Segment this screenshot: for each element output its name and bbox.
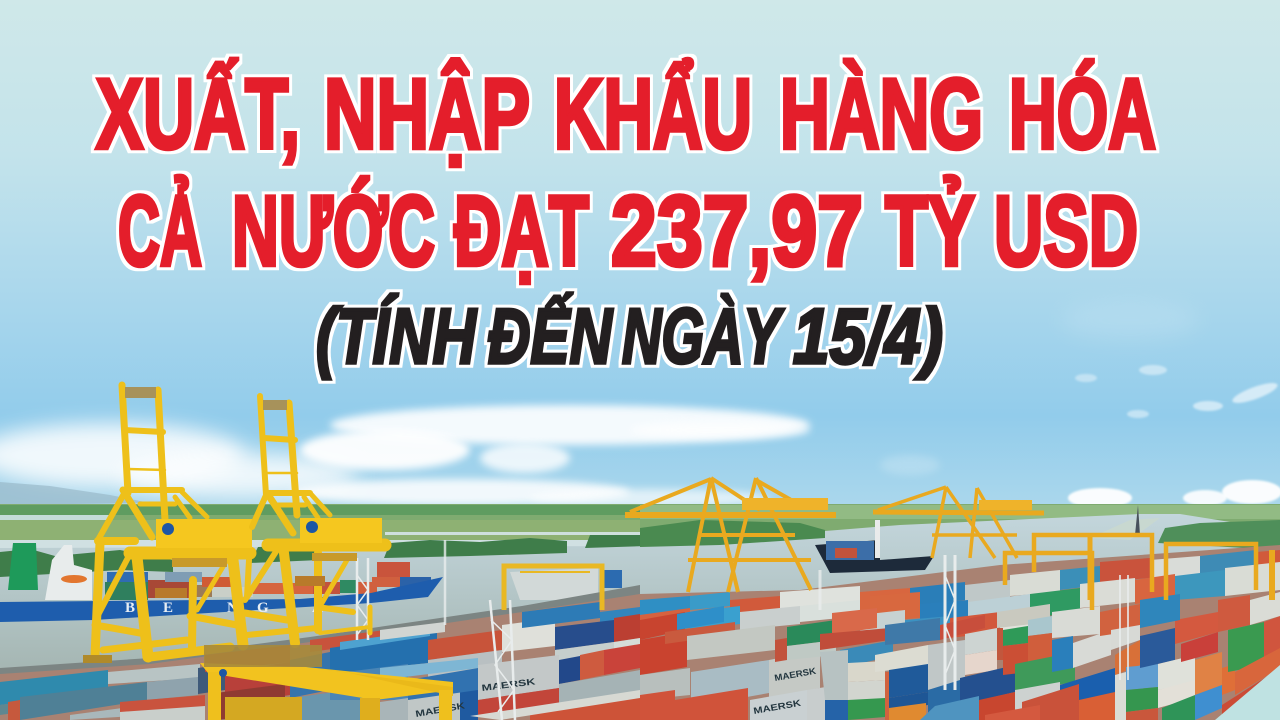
- container brand labels: MAERSK: [415, 700, 466, 719]
- far crane pair B: [873, 487, 1044, 558]
- title line 2: NƯỚC: [232, 175, 435, 286]
- distant mountains: [0, 482, 150, 505]
- container yard: far rows: [600, 550, 1280, 640]
- title line 2: USD: [994, 175, 1138, 286]
- crane A machinery house: [83, 519, 252, 663]
- light towers: [357, 540, 1128, 720]
- container base field: [0, 545, 1280, 720]
- mast: [260, 396, 266, 495]
- hull: [0, 577, 443, 622]
- subtitle date: [316, 292, 943, 380]
- white superstructure: [45, 545, 92, 600]
- container crane A: [95, 385, 250, 657]
- tree lines: [0, 505, 1280, 577]
- crane B logo: [306, 521, 318, 533]
- marshland: [0, 504, 1280, 548]
- far crane pair A: [625, 478, 836, 592]
- far quay cranes: [625, 478, 1272, 610]
- subtitle date: NGÀY: [622, 292, 784, 380]
- far ship: [510, 520, 934, 600]
- title line 1: [96, 58, 1156, 169]
- container yard: left rows: [0, 602, 640, 720]
- green funnel: [8, 543, 38, 590]
- title line 1: NHẬP: [324, 58, 530, 169]
- crane spreaders: [155, 553, 357, 598]
- small gantry behind: [504, 566, 602, 610]
- title line 2: [118, 175, 1138, 286]
- quay: [0, 585, 640, 690]
- title: [96, 58, 1156, 380]
- river: [0, 514, 1280, 680]
- title line 1: KHẨU: [554, 58, 752, 169]
- crane B machinery house: [300, 518, 382, 543]
- crane A logo: [162, 523, 174, 535]
- subtitle date: 15/4): [793, 292, 943, 380]
- container brand labels: [415, 666, 817, 719]
- title line 1: XUẤT,: [96, 58, 300, 169]
- frame: [125, 487, 182, 493]
- subtitle date: ĐẾN: [488, 292, 613, 380]
- title line 2: TỶ: [885, 175, 975, 286]
- clouds: [0, 300, 1280, 508]
- container brand labels: MAERSK: [774, 666, 817, 683]
- title line 2: ĐẠT: [454, 175, 589, 286]
- title line 1: HÀNG: [780, 58, 983, 169]
- container brand labels: MAERSK: [481, 676, 537, 693]
- RTG gantry front: [200, 645, 453, 720]
- title line 1: HÓA: [1009, 58, 1156, 169]
- title line 2: 237,97: [611, 175, 863, 286]
- container crane B: [245, 396, 385, 643]
- lifeboat: [61, 575, 87, 583]
- crane A feet: [83, 655, 112, 663]
- title line 2: CẢ: [118, 175, 202, 286]
- subtitle date: (TÍNH: [316, 292, 477, 380]
- ship name: BENGA: [125, 600, 323, 616]
- ship: Bengal: [0, 543, 443, 622]
- corner accent: [1215, 665, 1280, 720]
- container yard: right near rows: [640, 592, 1280, 720]
- ship containers: [105, 562, 431, 600]
- yard gantries: [1005, 535, 1272, 610]
- sky background: [0, 0, 1280, 520]
- mast: [122, 385, 128, 493]
- container brand labels: MAERSK: [753, 698, 802, 716]
- frame: [267, 490, 310, 496]
